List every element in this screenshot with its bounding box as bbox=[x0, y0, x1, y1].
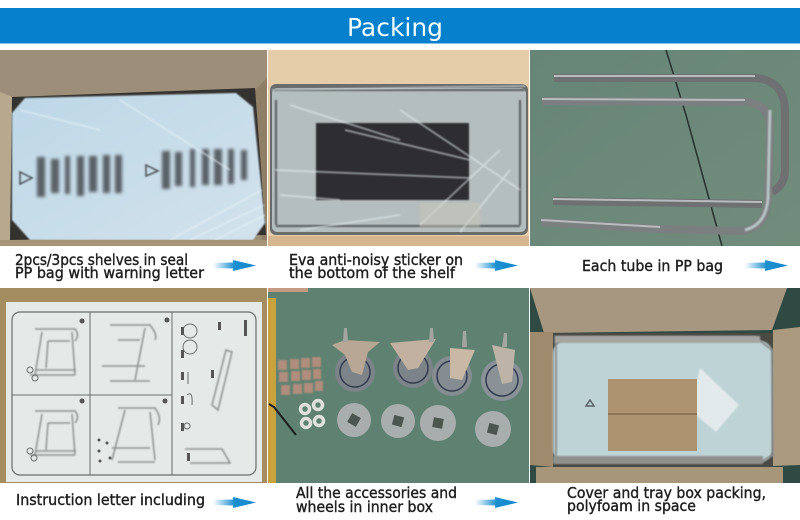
caption: accessories: All the accessories and bbox=[296, 484, 457, 502]
caption: accessories bbox=[296, 484, 457, 516]
caption: shelves bbox=[15, 251, 205, 282]
panel: accessories and wheels photo bbox=[268, 288, 529, 483]
caption: cover and tray: Cover and tray box packing, bbox=[567, 484, 766, 502]
caption: instruction letter: Instruction letter including bbox=[16, 491, 205, 509]
caption: shelves: 2pcs/3pcs shelves in seal bbox=[15, 251, 188, 269]
caption: shelves: PP bag with warning letter bbox=[15, 264, 205, 282]
caption: sticker: Eva anti-noisy sticker on bbox=[289, 251, 463, 269]
caption: tubes: Each tube in PP bag bbox=[582, 257, 723, 275]
plastic film highlights bbox=[272, 86, 525, 232]
tube pair back bbox=[553, 78, 785, 204]
white shelf sheet bbox=[12, 93, 265, 240]
plastic film highlights bbox=[20, 100, 265, 240]
caption: cover and tray bbox=[567, 484, 766, 515]
corner brackets bbox=[278, 357, 323, 395]
tube pair front bbox=[541, 101, 770, 231]
tray with film bbox=[553, 341, 772, 462]
title: Packing bbox=[347, 13, 443, 42]
arrow bbox=[213, 260, 256, 271]
caption: sticker: the bottom of the shelf bbox=[289, 264, 456, 282]
panel: tubes photo bbox=[530, 50, 800, 246]
caption: cover and tray: polyfoam in space bbox=[567, 497, 696, 515]
panel: cover and tray box photo bbox=[530, 288, 800, 483]
inner box bbox=[608, 379, 697, 451]
arrow bbox=[745, 260, 788, 271]
instruction sheet bbox=[690, 368, 739, 432]
wheels bbox=[332, 328, 523, 401]
black sticker bbox=[316, 123, 469, 200]
title banner bbox=[0, 8, 800, 44]
caption: sticker bbox=[289, 251, 463, 282]
wheel plates bbox=[337, 403, 511, 447]
assembly diagrams bbox=[30, 325, 232, 463]
panel: shelves in seal bag photo bbox=[0, 50, 267, 246]
washers bbox=[300, 400, 324, 428]
hex key bbox=[269, 404, 296, 435]
arrow bbox=[475, 497, 518, 508]
caption: accessories: wheels in inner box bbox=[296, 498, 433, 516]
warning icons bbox=[20, 165, 158, 184]
arrow bbox=[213, 497, 256, 508]
panel: anti-noisy sticker photo bbox=[268, 50, 529, 246]
arrow bbox=[475, 260, 518, 271]
warning letter print bbox=[37, 149, 247, 197]
panel: instruction letter photo bbox=[0, 288, 267, 483]
